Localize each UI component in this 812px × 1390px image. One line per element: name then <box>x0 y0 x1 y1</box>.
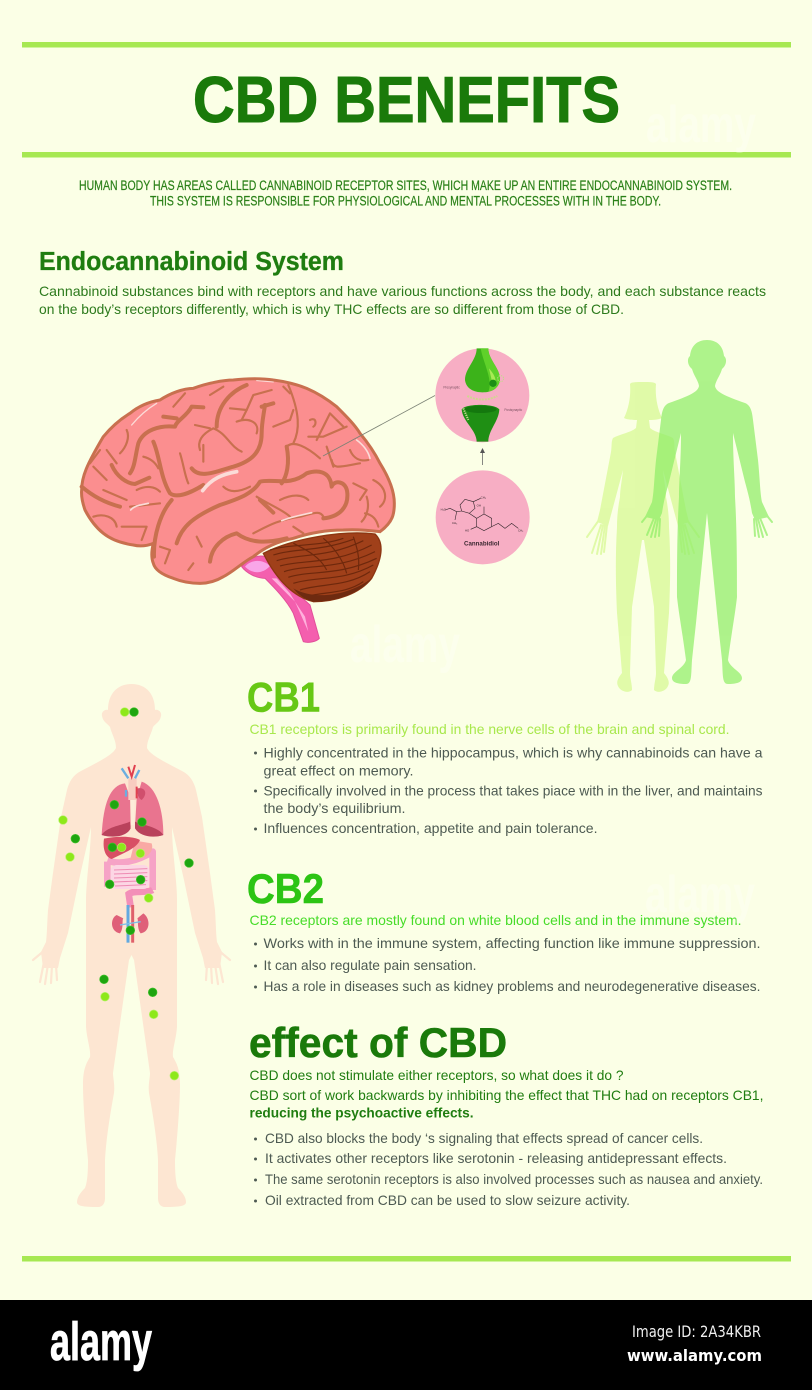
CB1 subtitle: CB1 receptors is primarily found in the nerve cells of the brain and spinal cord. <box>250 721 730 737</box>
postsynaptic bulb <box>462 405 499 442</box>
site url: www.alamy.com <box>627 1346 762 1365</box>
pointer line <box>323 396 435 456</box>
circle: cannabidiol molecule: H₂C <box>441 507 446 511</box>
body silhouette <box>33 684 230 1207</box>
woman silhouette <box>587 382 699 692</box>
section: effect of CBD <box>249 1019 764 1208</box>
synapse labels <box>443 385 523 412</box>
arrow: molecule to synapse <box>480 448 485 465</box>
circle: synapse <box>435 348 529 442</box>
effect of CBD intro <box>250 1067 764 1120</box>
cerebrum <box>82 379 394 583</box>
small intestine <box>111 865 149 889</box>
synapse labels: Presynaptic <box>443 385 460 389</box>
CB2 heading: CB2 <box>247 865 324 912</box>
CB2 subtitle: CB2 receptors are mostly found on white blood cells and in the immune system. <box>250 912 742 928</box>
human body with organs <box>33 684 230 1207</box>
CB2 bullets <box>254 935 760 994</box>
molecule structure <box>445 498 518 531</box>
circle: cannabidiol molecule: HO <box>465 529 470 533</box>
effect of CBD bullets <box>254 1130 763 1208</box>
CB2 bullets: Works with in the immune system, affecting function like immune suppression. <box>264 935 760 951</box>
effect of CBD intro: CBD does not stimulate either receptors, so what does it do ? <box>250 1067 624 1083</box>
CB1 bullets: great effect on memory. <box>264 762 414 778</box>
intro text <box>79 178 732 208</box>
top bar <box>22 42 791 48</box>
large intestine <box>107 852 153 890</box>
footer logo: alamy <box>50 1312 152 1372</box>
organs <box>102 765 163 943</box>
CB2 bullets: Has a role in diseases such as kidney problems and neurodegenerative diseases. <box>264 978 760 994</box>
watermarks: alamy <box>645 866 755 924</box>
liver <box>104 837 140 859</box>
presynaptic bulb <box>465 348 500 392</box>
brain folds <box>82 385 347 562</box>
effect of CBD bullets: Oil extracted from CBD can be used to slow seizure activity. <box>265 1192 630 1208</box>
watermarks: alamy <box>350 616 460 674</box>
CB1 bullets <box>254 744 763 836</box>
watermarks: alamy <box>646 96 756 154</box>
kidneys <box>112 915 123 933</box>
brain illustration <box>82 379 394 642</box>
circle: cannabidiol molecule: CH₃ <box>452 521 457 525</box>
endocannabinoid paragraph: on the body’s receptors differently, which is why THC effects are so different from those of CBD. <box>39 301 624 317</box>
CB1 bullets: Influences concentration, appetite and pain tolerance. <box>264 820 598 836</box>
CB1 bullets: Specifically involved in the process that takes piace with in the liver, and maintains <box>264 782 762 798</box>
CB2 bullets: It can also regulate pain sensation. <box>264 957 476 973</box>
endocannabinoid paragraph <box>39 283 766 317</box>
watermarks <box>350 96 756 924</box>
brain stem <box>242 556 319 642</box>
effect of CBD intro: CBD sort of work backwards by inhibiting the effect that THC had on receptors CB1, <box>250 1087 764 1103</box>
CB1 heading: CB1 <box>247 674 320 720</box>
footer band <box>0 1300 812 1390</box>
intro text: THIS SYSTEM IS RESPONSIBLE FOR PHYSIOLOGICAL AND MENTAL PROCESSES WITH IN THE BODY. <box>150 194 661 208</box>
section: CB1 <box>247 674 763 836</box>
bottom bar <box>22 1256 791 1262</box>
section: CB2 <box>247 865 760 994</box>
effect of CBD bullets: The same serotonin receptors is also involved processes such as nausea and anxiety. <box>265 1171 763 1187</box>
cerebellum <box>263 533 381 602</box>
effect of CBD intro: reducing the psychoactive effects. <box>250 1104 474 1120</box>
aorta and vena cava <box>123 905 132 943</box>
brain highlights <box>131 381 370 521</box>
stomach <box>130 841 152 860</box>
receptor dots <box>59 708 193 935</box>
title underline bar <box>22 152 791 158</box>
effect of CBD bullets: It activates other receptors like serotonin - releasing antidepressant effects. <box>265 1150 727 1166</box>
heart and vessels <box>137 788 145 800</box>
molecule label: Cannabidiol <box>464 541 500 548</box>
circle: cannabidiol molecule: OH <box>477 504 481 508</box>
image id: Image ID: 2A34KBR <box>632 1322 761 1341</box>
synapse labels: Postsynaptic <box>504 408 523 412</box>
effect of CBD heading: effect of CBD <box>249 1019 507 1066</box>
man silhouette <box>642 340 772 684</box>
lungs <box>102 783 131 837</box>
CB1 bullets: the body’s equilibrium. <box>264 800 406 816</box>
title: CBD BENEFITS <box>193 63 620 136</box>
silhouettes: woman and man <box>587 340 772 692</box>
effect of CBD bullets: CBD also blocks the body ‘s signaling that effects spread of cancer cells. <box>265 1130 703 1146</box>
endocannabinoid paragraph: Cannabinoid substances bind with receptors and have various functions across the body, and each substance reacts <box>39 283 766 299</box>
circle: cannabidiol molecule <box>436 470 530 564</box>
heading: endocannabinoid system: Endocannabinoid System <box>39 248 344 276</box>
circle: cannabidiol molecule: CH₃ <box>481 495 486 499</box>
CB1 bullets: Highly concentrated in the hippocampus, which is why cannabinoids can have a <box>264 744 763 760</box>
circle: cannabidiol molecule: CH₃ <box>518 529 523 533</box>
